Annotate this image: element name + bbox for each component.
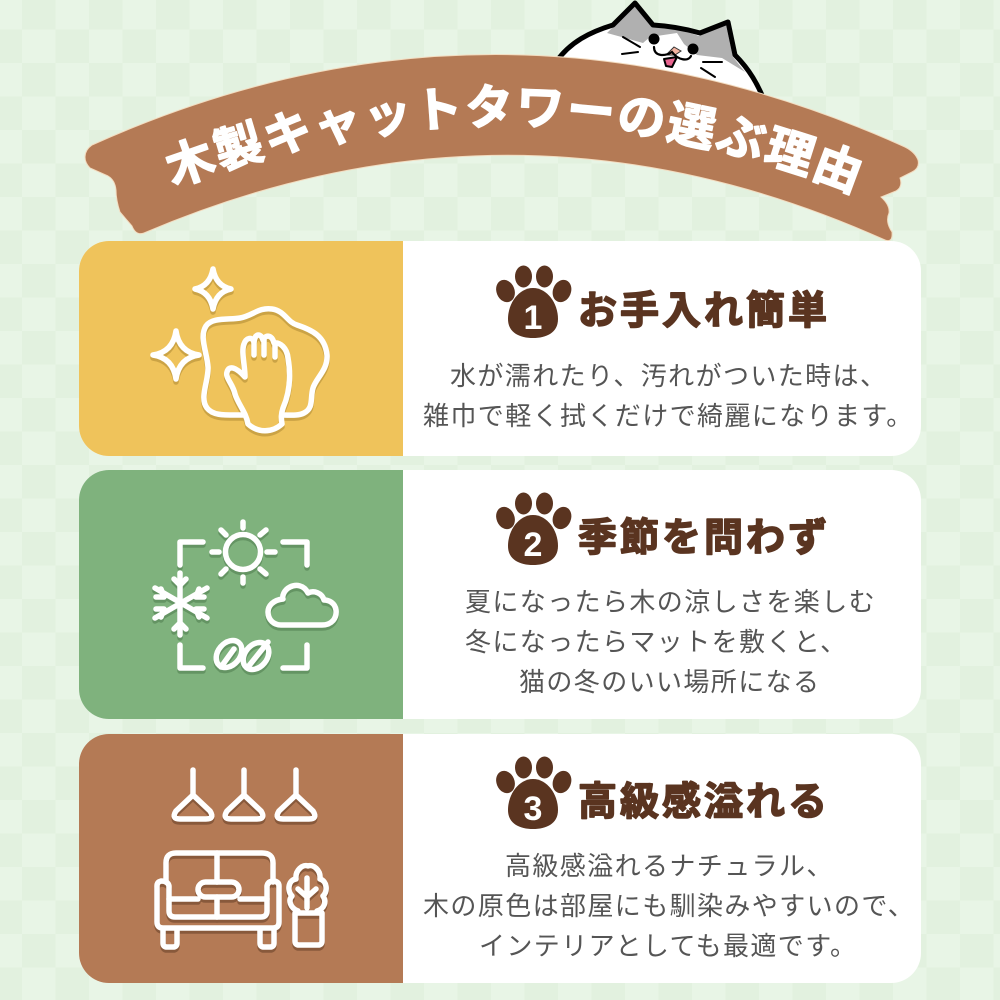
text block — [423, 361, 914, 431]
panel: card 1 easy care — [79, 241, 921, 456]
paw badge 2 — [493, 492, 575, 565]
cat peeking over banner — [556, 3, 764, 100]
text block: 冬になったらマットを敷くと、 — [465, 627, 848, 657]
paw badge 1: 1 — [524, 299, 542, 337]
text block: インテリアとしても最適です。 — [479, 931, 857, 961]
text block: 水が濡れたり、汚れがついた時は、 — [450, 361, 887, 391]
text block — [423, 851, 915, 961]
heading: 季節を問わず — [578, 517, 830, 560]
paw badge 1 — [493, 266, 575, 338]
text block: 高級感溢れるナチュラル、 — [505, 851, 834, 881]
heading: お手入れ簡単 — [578, 290, 830, 333]
panel: card 2 all seasons — [79, 470, 921, 719]
text block: 雑巾で軽く拭くだけで綺麗になります。 — [423, 401, 914, 431]
text block: 猫の冬のいい場所になる — [519, 667, 820, 697]
title: 木製キャットタワーの選ぶ理由 — [165, 83, 862, 196]
paw badge 3 — [493, 756, 575, 829]
panel: card 3 luxury — [79, 734, 921, 983]
icon: sofa, lamps and plant — [157, 770, 326, 947]
icon: cloth and hand with sparkles — [153, 269, 327, 431]
text block: 木の原色は部屋にも馴染みやすいので、 — [423, 891, 915, 921]
text block: 夏になったら木の涼しさを楽しむ — [465, 587, 876, 617]
paw badge 3: 3 — [524, 790, 542, 828]
text block — [465, 587, 876, 697]
heading: 高級感溢れる — [578, 781, 830, 824]
paw badge 2: 2 — [524, 526, 542, 564]
banner — [84, 54, 919, 241]
icon: seasons — [155, 522, 336, 675]
